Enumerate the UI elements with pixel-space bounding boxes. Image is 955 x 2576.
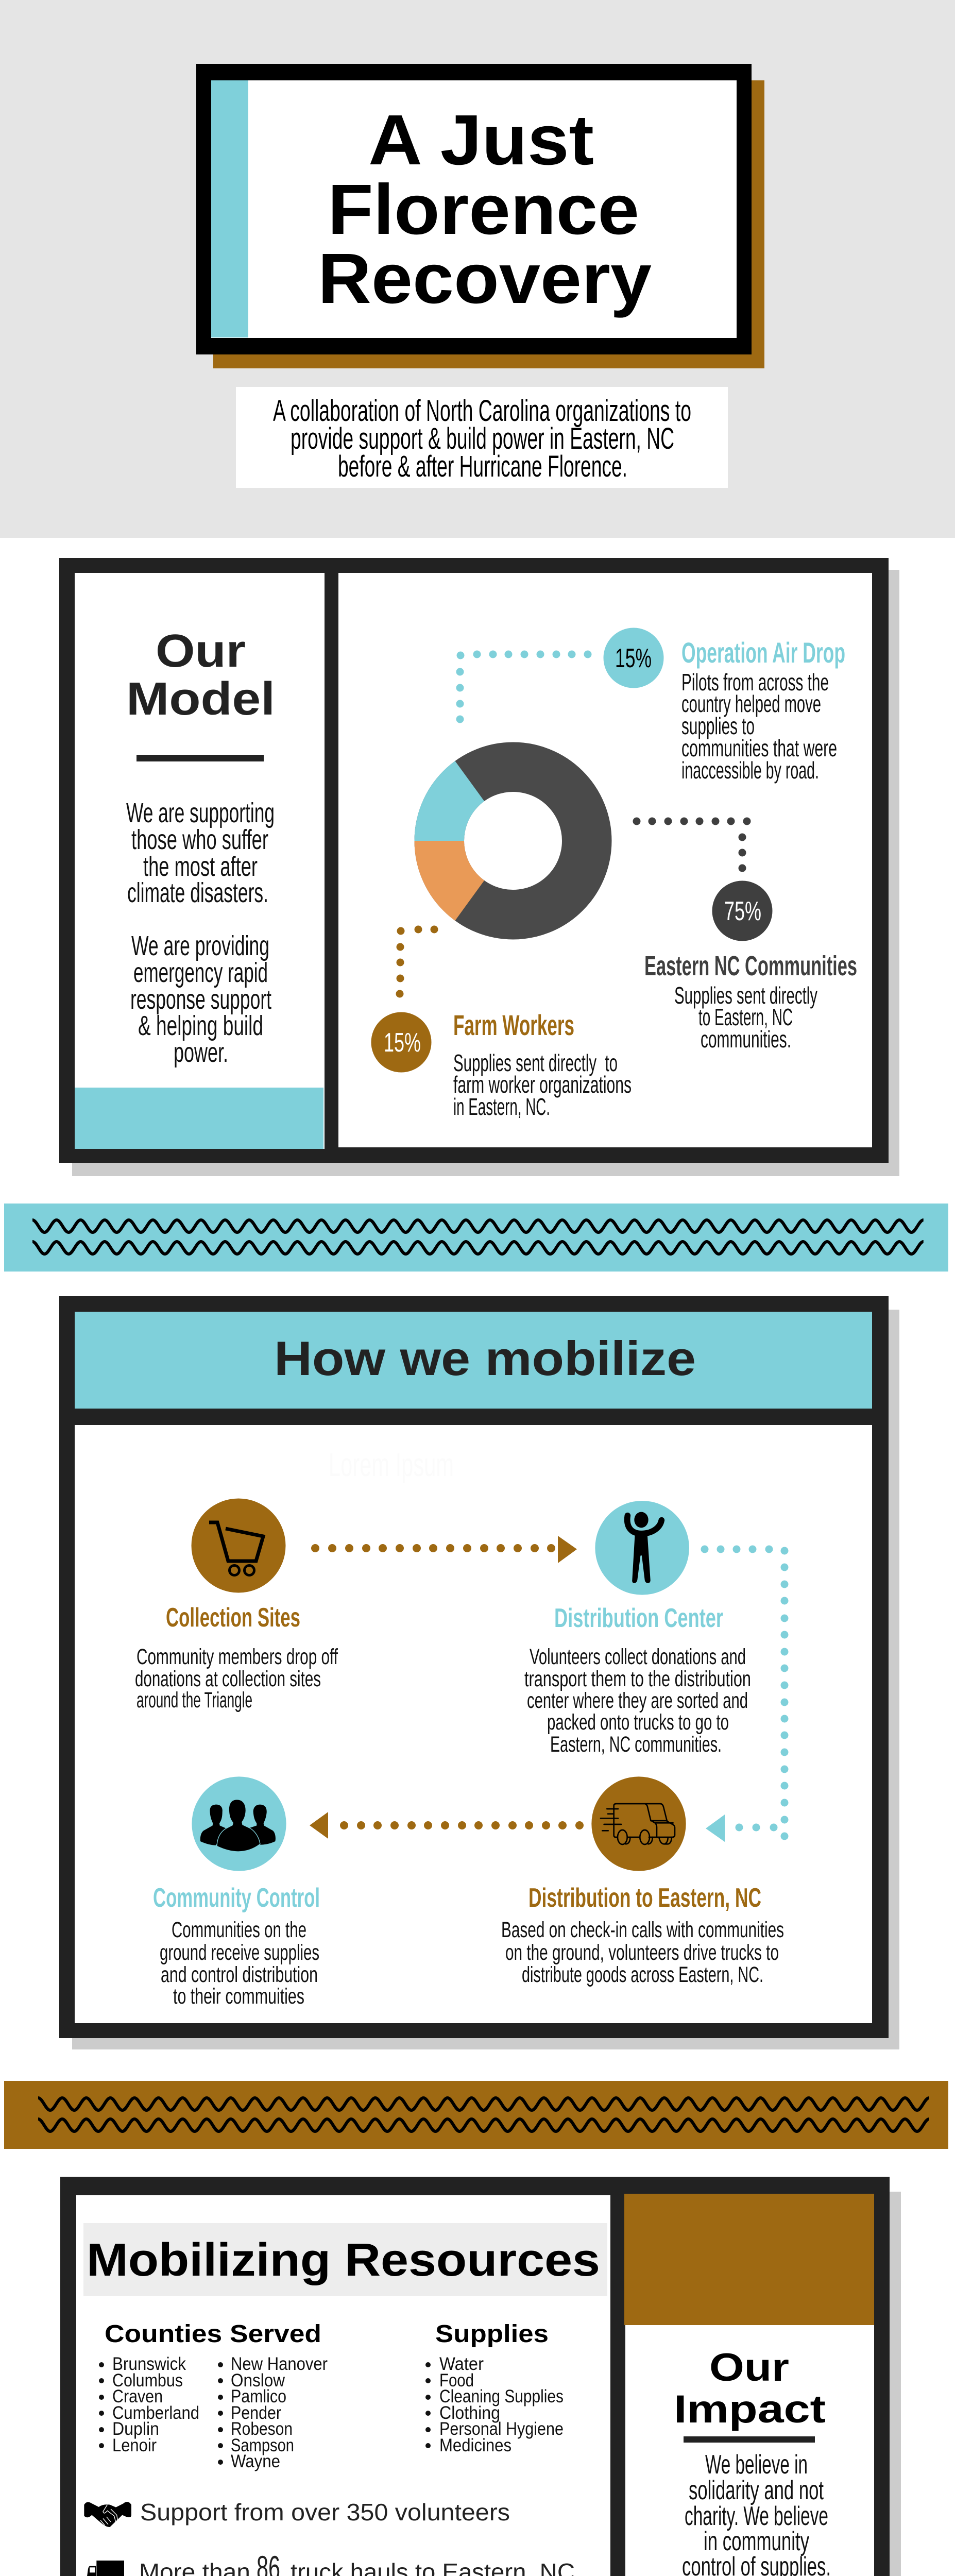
subtitle box: A collaboration of North Carolina organizations to <box>273 394 691 428</box>
impact description text: solidarity and not <box>689 2476 824 2505</box>
model description text: We are supporting <box>126 798 275 828</box>
list: supplies: Medicines <box>439 2435 511 2455</box>
callout: operation air drop: inaccessible by road. <box>681 757 819 784</box>
callout: operation air drop <box>604 628 845 784</box>
impact description text <box>678 2450 834 2576</box>
heading: our model: Model <box>126 673 275 725</box>
icon: shopping cart <box>192 1498 285 1593</box>
step: community control: and control distribution <box>161 1962 318 1987</box>
title: Recovery <box>318 239 652 318</box>
model description text: those who suffer <box>131 824 268 855</box>
list: counties served: Columbus <box>112 2370 183 2391</box>
callout: farm workers: in Eastern, NC. <box>453 1093 550 1120</box>
step: collection sites: around the Triangle <box>137 1688 252 1713</box>
step: distribution center: Distribution Center <box>554 1603 723 1633</box>
list: counties served: Counties Served <box>105 2320 321 2348</box>
step: community control: Communities on the <box>172 1918 306 1942</box>
step: collection sites: Community members drop off <box>137 1645 338 1669</box>
step: collection sites: Collection Sites <box>166 1603 300 1633</box>
model description text: We are providing <box>131 930 269 961</box>
list: counties served: Craven <box>112 2386 163 2406</box>
heading: our impact <box>674 2346 826 2431</box>
callout: eastern nc communities: communities. <box>701 1026 791 1053</box>
impact description text: charity. We believe <box>685 2501 828 2531</box>
callout: farm workers: Farm Workers <box>453 1009 574 1041</box>
model description text: response support <box>130 984 271 1015</box>
stat: truck hauls <box>139 2549 575 2576</box>
wave band: brown <box>4 2081 948 2149</box>
heading: mobilizing resources <box>83 2223 607 2296</box>
arrow: distribution to trucks <box>701 1546 788 1842</box>
list: supplies: Personal Hygiene <box>439 2419 564 2439</box>
icon: three people <box>192 1776 286 1871</box>
model description text: & helping build <box>138 1010 263 1041</box>
list: supplies <box>425 2320 564 2455</box>
step: community control: to their commuities <box>173 1984 304 2009</box>
step: community control <box>153 1883 320 2009</box>
list: counties served: Duplin <box>112 2419 159 2439</box>
dotted connector: farm workers <box>396 925 438 997</box>
dotted connector: operation air drop <box>456 650 591 723</box>
callout: farm workers: 15% <box>384 1028 421 1058</box>
callout: eastern nc communities: Supplies sent directly <box>674 982 817 1009</box>
faint placeholder text: Lorem Ipsum <box>329 1446 454 1483</box>
list: counties served: Pamlico <box>231 2386 286 2406</box>
step: distribution to eastern nc <box>501 1883 784 1987</box>
icon: delivery truck <box>591 1776 686 1871</box>
list: counties served: Sampson <box>231 2435 294 2455</box>
callout: farm workers <box>371 1009 632 1120</box>
step: distribution to eastern nc: Distribution to Eastern, NC <box>528 1883 761 1913</box>
title <box>318 100 652 318</box>
callout: operation air drop: Operation Air Drop <box>681 636 845 669</box>
step: distribution center <box>524 1603 751 1757</box>
header section <box>0 0 955 538</box>
list: counties served: Robeson <box>231 2419 293 2439</box>
wave band: teal <box>4 1204 948 1272</box>
callout: operation air drop: supplies to <box>681 713 755 739</box>
model description text: power. <box>174 1037 228 1068</box>
step: distribution to eastern nc: Based on check-in calls with communities <box>501 1918 784 1942</box>
list: counties served: Wayne <box>231 2451 280 2471</box>
list: supplies: Supplies <box>435 2320 549 2348</box>
heading: our impact: Our <box>709 2346 789 2389</box>
title: A Just <box>368 100 594 180</box>
icon: truck <box>87 2561 124 2576</box>
step: distribution center: packed onto trucks to go to <box>547 1710 729 1735</box>
subtitle box <box>236 387 728 488</box>
list: counties served: Lenoir <box>112 2435 157 2455</box>
list: counties served: Pender <box>231 2403 281 2423</box>
callout: eastern nc communities <box>644 881 857 1053</box>
callout: eastern nc communities: 75% <box>724 896 761 926</box>
callout: operation air drop: Pilots from across the <box>681 669 829 696</box>
list: supplies: Clothing <box>439 2403 500 2423</box>
list: supplies: Water <box>439 2354 484 2374</box>
subtitle box: before & after Hurricane Florence. <box>338 450 627 483</box>
step: community control: ground receive supplies <box>160 1940 319 1965</box>
callout: farm workers: Supplies sent directly to <box>453 1049 618 1076</box>
list: counties served: Cumberland <box>112 2403 199 2423</box>
model description text: the most after <box>143 851 258 882</box>
step: community control: Community Control <box>153 1883 320 1913</box>
icon: person with raised arms <box>595 1501 689 1595</box>
step: distribution center: center where they are sorted and <box>527 1688 748 1713</box>
step: distribution center: Volunteers collect donations and <box>530 1645 746 1669</box>
list: counties served: New Hanover <box>231 2354 328 2374</box>
dotted connector: eastern nc <box>633 817 751 872</box>
heading: our model: Our <box>156 625 246 677</box>
step: distribution center: Eastern, NC communities. <box>550 1732 722 1757</box>
panel: our model <box>59 558 899 1176</box>
heading: our model <box>126 625 275 725</box>
list: supplies: Food <box>439 2370 474 2391</box>
icon: handshake <box>84 2502 131 2527</box>
step: collection sites: donations at collection sites <box>135 1667 321 1691</box>
callout: operation air drop: communities that were <box>681 735 837 761</box>
panel: mobilizing resources and impact <box>60 2177 901 2576</box>
donut chart <box>414 761 587 921</box>
heading: mobilizing resources: Mobilizing Resources <box>87 2234 600 2286</box>
step: distribution to eastern nc: on the ground, volunteers drive trucks to <box>505 1940 779 1965</box>
arrow: collection to distribution <box>311 1536 577 1563</box>
callout: farm workers: farm worker organizations <box>453 1071 632 1098</box>
panel: how we mobilize <box>59 1296 899 2049</box>
callout: eastern nc communities: to Eastern, NC <box>698 1004 793 1030</box>
heading: our impact: Impact <box>674 2387 826 2431</box>
step: collection sites <box>135 1603 338 1713</box>
arrow: trucks to community control <box>310 1812 584 1839</box>
impact description text: in community <box>704 2527 809 2556</box>
title: Florence <box>328 170 639 249</box>
subtitle box: provide support & build power in Eastern, NC <box>291 422 674 455</box>
impact description text: We believe in <box>705 2450 808 2480</box>
model description text: emergency rapid <box>133 957 268 988</box>
model description text <box>126 798 275 1068</box>
callout: operation air drop: country helped move <box>681 690 821 717</box>
list: counties served <box>99 2320 328 2471</box>
stat: volunteers: Support from over 350 volunteers <box>140 2499 510 2526</box>
list: counties served: Onslow <box>231 2370 285 2391</box>
step: distribution to eastern nc: distribute goods across Eastern, NC. <box>522 1962 763 1987</box>
step: distribution center: transport them to the distribution <box>524 1667 751 1691</box>
list: counties served: Brunswick <box>112 2354 186 2374</box>
list: supplies: Cleaning Supplies <box>439 2386 564 2406</box>
heading: how we mobilize: How we mobilize <box>274 1331 696 1385</box>
model description text: climate disasters. <box>127 877 268 908</box>
callout: operation air drop: 15% <box>615 643 652 673</box>
